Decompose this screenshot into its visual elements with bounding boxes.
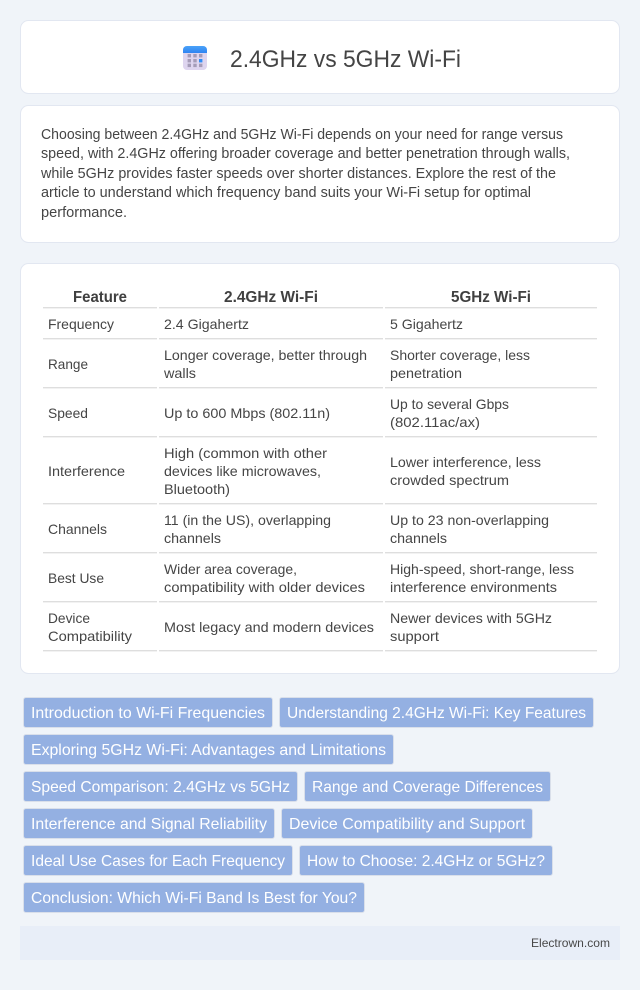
row: best use: Wider area coverage, <box>164 561 297 577</box>
row: best use: compatibility with older devices <box>164 579 365 595</box>
row: channels: Channels <box>48 521 107 537</box>
table header row: Feature <box>73 289 127 306</box>
row: interference: Interference <box>48 463 125 479</box>
table header row: 5GHz Wi-Fi <box>451 289 531 306</box>
row: interference <box>48 445 541 497</box>
row: frequency: 5 Gigahertz <box>390 316 463 332</box>
row: channels <box>48 512 549 546</box>
row: speed: Up to 600 Mbps (802.11n) <box>164 405 330 421</box>
row: best use <box>48 561 574 595</box>
row: interference: Lower interference, less <box>390 454 541 470</box>
panel: header <box>20 20 620 94</box>
row: device compatibility: support <box>390 628 439 644</box>
row: frequency: 2.4 Gigahertz <box>164 316 249 332</box>
tag: conclusion: Conclusion: Which Wi-Fi Band Is Best for You? <box>31 890 357 907</box>
row: range: walls <box>163 365 196 381</box>
icon: calendar grid <box>183 46 207 70</box>
row: device compatibility: Compatibility <box>48 628 132 644</box>
tag: speed comparison <box>24 772 298 802</box>
footer credit: Electrown.com <box>531 936 610 950</box>
tag: interference: Interference and Signal Reliability <box>31 816 267 833</box>
tag: range and coverage: Range and Coverage Differences <box>312 779 543 796</box>
tag: understanding 2.4GHz: Understanding 2.4GHz Wi-Fi: Key Features <box>287 705 586 722</box>
row: speed: (802.11ac/ax) <box>390 414 480 430</box>
text block: intro paragraph: article to understand which frequency band suits your Wi-Fi setup for optimal <box>41 185 531 201</box>
tag: how to choose <box>300 846 552 876</box>
text block: intro paragraph: Choosing between 2.4GHz and 5GHz Wi-Fi depends on your need for range versus <box>41 127 563 143</box>
tag: introduction <box>24 698 272 728</box>
tag: understanding 2.4GHz <box>280 698 594 728</box>
row: range: penetration <box>390 365 462 381</box>
row: device compatibility <box>48 610 552 644</box>
tag: exploring 5GHz: Exploring 5GHz Wi-Fi: Advantages and Limitations <box>31 742 386 759</box>
row: device compatibility: Newer devices with 5GHz <box>390 610 552 626</box>
row: interference: devices like microwaves, <box>164 463 321 479</box>
tag: how to choose: How to Choose: 2.4GHz or 5GHz? <box>307 853 545 870</box>
table header row: 2.4GHz Wi-Fi <box>224 289 318 306</box>
row: device compatibility: Most legacy and modern devices <box>164 619 374 635</box>
panel: introduction <box>20 106 620 242</box>
footer <box>20 926 620 960</box>
row: range: Shorter coverage, less <box>390 347 530 363</box>
tag: ideal use cases: Ideal Use Cases for Each Frequency <box>31 853 285 870</box>
row: channels: 11 (in the US), overlapping <box>164 512 331 528</box>
row: interference: Bluetooth) <box>164 481 230 497</box>
row: speed <box>48 396 509 430</box>
tag: speed comparison: Speed Comparison: 2.4GHz vs 5GHz <box>31 779 290 796</box>
tag: introduction: Introduction to Wi-Fi Frequencies <box>31 705 265 722</box>
row: best use: High-speed, short-range, less <box>390 561 574 577</box>
row: speed: Up to several Gbps <box>390 396 509 412</box>
row: channels: channels <box>164 530 221 546</box>
row: interference: crowded spectrum <box>390 472 509 488</box>
tag: device compatibility <box>282 808 532 838</box>
row: device compatibility: Device <box>48 610 90 626</box>
title: 2.4GHz vs 5GHz Wi-Fi <box>230 46 461 73</box>
panel: topic tags <box>24 698 594 912</box>
row: range: Range <box>48 356 88 372</box>
tag: conclusion <box>24 882 364 912</box>
row: channels: Up to 23 non-overlapping <box>390 512 549 528</box>
row: speed: Speed <box>48 405 88 421</box>
panel: comparison table <box>20 264 620 674</box>
tag: interference <box>24 808 274 838</box>
tag: ideal use cases <box>24 846 292 876</box>
row: channels: channels <box>390 530 447 546</box>
tag: exploring 5GHz <box>24 734 394 764</box>
row: best use: interference environments <box>390 579 557 595</box>
text block: intro paragraph: while 5GHz provides faster speeds over shorter distances. Explore the rest of the <box>40 166 556 182</box>
tag: device compatibility: Device Compatibility and Support <box>289 816 526 833</box>
row: range: Longer coverage, better through <box>164 347 367 363</box>
row: range <box>48 347 530 381</box>
table header row <box>73 289 531 306</box>
text block: intro paragraph <box>40 127 570 221</box>
row: best use: Best Use <box>48 570 104 586</box>
text block: intro paragraph: performance. <box>41 205 127 221</box>
row: interference: High (common with other <box>164 445 327 461</box>
text block: intro paragraph: speed, with 2.4GHz offering broader coverage and better penetration through walls, <box>41 146 570 162</box>
row: frequency <box>48 316 463 332</box>
tag: range and coverage <box>304 772 550 802</box>
row: frequency: Frequency <box>48 316 114 332</box>
